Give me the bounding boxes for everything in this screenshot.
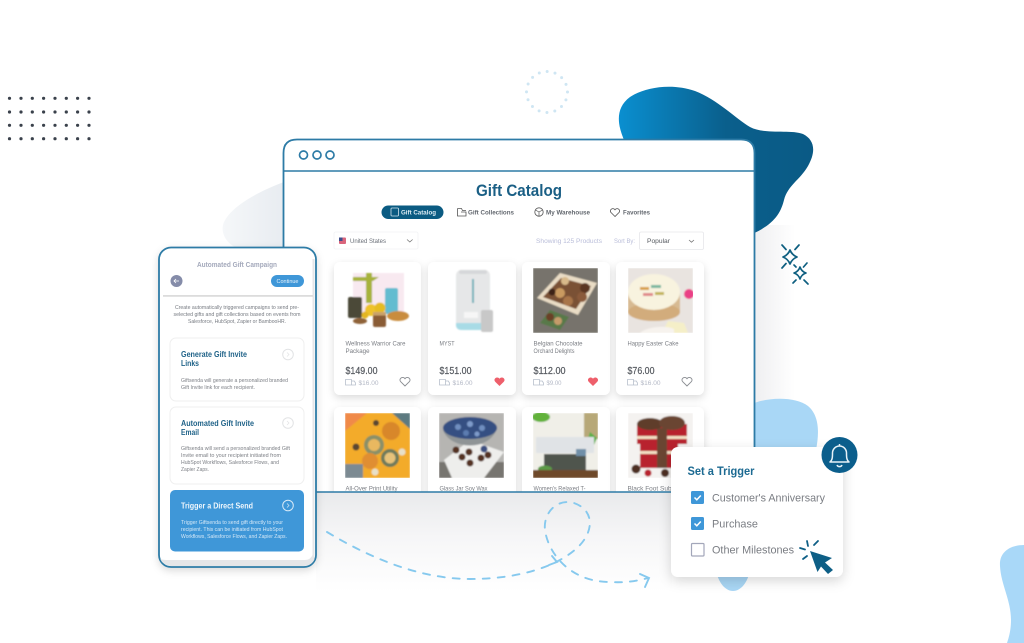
back button [170, 275, 182, 287]
product name: Belgian Chocolate [534, 340, 583, 348]
tab: Gift Collections [458, 208, 514, 216]
phone title: Automated Gift Campaign [197, 260, 277, 269]
option icon [283, 349, 293, 360]
window bottom edge [310, 491, 680, 493]
sparkles [782, 245, 808, 284]
option description: Giftsenda will send a personalized branded Gift [181, 446, 290, 452]
photo: red gift box [628, 413, 693, 478]
dashed arrow [327, 502, 649, 587]
option: Generate Gift Invite Links [170, 338, 304, 401]
dotted circle [526, 72, 568, 112]
product name: Package [346, 348, 370, 355]
photo: orange bowls [345, 413, 410, 478]
continue button [271, 275, 304, 287]
blob: light blue below trigger card [716, 570, 750, 591]
option: Purchase [691, 517, 758, 530]
card: Women's Relaxed T [519, 412, 613, 491]
option description: Workflows, Salesforce Flows, and Zapier Zaps. [181, 534, 287, 540]
photo: chocolates [533, 268, 598, 333]
small chevron [549, 556, 557, 565]
option: Other Milestones: Other Milestones [712, 544, 794, 556]
icon: bell badge [822, 437, 858, 473]
option description: Invite email to your recipient initiated from [181, 453, 281, 459]
phone divider [163, 295, 313, 297]
intro text: Create automatically triggered campaigns to send pre- [175, 305, 299, 311]
shipping: $9.00 [546, 380, 562, 387]
tab: Favorites: Favorites [623, 210, 650, 216]
card: MYST [428, 262, 516, 395]
heading: Gift Catalog [476, 182, 562, 200]
shipping: $16.00 [640, 380, 661, 387]
decorative shadow right of window [755, 225, 795, 405]
option icon [283, 500, 293, 511]
sort dropdown [640, 232, 704, 250]
tab: Gift Catalog active: Gift Catalog [401, 210, 436, 216]
product name: Orchard Delights [534, 348, 575, 355]
tab: Gift Catalog active [382, 206, 444, 219]
product name [534, 340, 583, 355]
option title: Automated Gift Invite [181, 418, 254, 428]
option description: Zapier Zaps. [181, 467, 209, 473]
decorative floor shadow under window [316, 492, 672, 592]
option title: Links [181, 358, 199, 368]
window frame [284, 140, 754, 450]
tab: My Warehouse: My Warehouse [546, 210, 590, 216]
option: Purchase: Purchase [712, 518, 758, 530]
option description: Giftsenda will generate a personalized branded [181, 378, 288, 384]
phone body [159, 248, 316, 567]
product name: Wellness Warrior Care [346, 340, 406, 348]
intro text: selected gifts and gift collections based on events from [174, 312, 301, 318]
card: Belgian Chocolate Orchard Delights [522, 262, 610, 395]
option description: HubSpot Workflows, Salesforce Flows, and [181, 460, 279, 466]
option description: Gift Invite link for each recipient. [181, 385, 255, 391]
trigger card [671, 447, 843, 577]
tab: My Warehouse [535, 208, 590, 216]
price: $112.00 [534, 366, 566, 377]
product name: Happy Easter Cake [628, 340, 679, 348]
card: Black Foot Sublimation [613, 412, 707, 491]
icon: heart outline [682, 377, 692, 386]
intro text: Salesforce, HubSpot, Zapier or BambooHR. [188, 319, 286, 325]
trigger title: Set a Trigger [688, 466, 755, 478]
card: All-Over Print Utility [331, 412, 424, 492]
shipping: $16.00 [452, 380, 473, 387]
icon: heart filled [494, 377, 505, 386]
blob: light blue behind window [750, 399, 818, 450]
icon: heart outline [400, 377, 410, 386]
card: Glass Jar Soy Wax [425, 412, 519, 492]
product name: Women's Relaxed T- [534, 486, 586, 492]
photo: humidifier [456, 270, 493, 332]
option icon [283, 418, 293, 428]
product name: Glass Jar Soy Wax [440, 486, 488, 492]
icon: heart filled [588, 377, 598, 386]
icon: cursor click [800, 541, 833, 574]
option title: Trigger a Direct Send [181, 500, 253, 510]
photo: blueberries [439, 413, 504, 478]
photo: room with box [532, 412, 598, 478]
product grid [331, 266, 707, 492]
photo: cake [628, 268, 694, 333]
option title [181, 418, 254, 437]
shipping: $16.00 [358, 380, 379, 387]
window control dots [300, 151, 334, 159]
option title: Generate Gift Invite [181, 349, 247, 359]
phone inner shadow [160, 259, 314, 566]
product count: Showing 125 Products [536, 238, 603, 245]
tab: Favorites [610, 209, 650, 216]
blob: dark blue [619, 87, 813, 234]
photo: gift package [348, 273, 409, 327]
card: Wellness Warrior Care Package [334, 262, 421, 395]
arrowhead [640, 574, 649, 587]
phone panel [159, 248, 316, 567]
price: $151.00 [440, 366, 472, 377]
option: Trigger a Direct Send [170, 490, 304, 552]
option: Automated Gift Invite Email [170, 407, 304, 484]
window header divider [284, 170, 754, 172]
browser window [284, 140, 754, 527]
option: Customer's Anniversary: Customer's Anniversary [712, 492, 825, 504]
country dropdown: United States [350, 238, 386, 245]
product name: Black Foot Subli [628, 486, 674, 492]
blob: grey left [223, 182, 284, 251]
option description: Trigger Giftsenda to send gift directly to your [181, 520, 283, 526]
card: Happy Easter Cake [616, 262, 704, 395]
tab: Gift Collections: Gift Collections [468, 210, 514, 216]
product name: MYST [440, 340, 455, 348]
option description [181, 378, 288, 391]
intro text [174, 305, 301, 325]
price: $76.00 [628, 366, 655, 377]
option description [181, 520, 287, 540]
continue button: Continue [276, 279, 298, 285]
option title: Email [181, 427, 199, 437]
blob: corner light blue [1000, 545, 1024, 643]
sort dropdown: Popular [647, 238, 671, 245]
price: $149.00 [346, 366, 378, 377]
sort by label: Sort By: [614, 238, 635, 245]
dot grid [8, 97, 91, 140]
option description: recipient. This can be initiated from HubSpot [181, 527, 283, 533]
product name [346, 340, 406, 355]
product name: All-Over Print Utility [346, 486, 398, 492]
option description [181, 446, 290, 473]
option title [181, 349, 247, 368]
country dropdown [334, 232, 418, 249]
